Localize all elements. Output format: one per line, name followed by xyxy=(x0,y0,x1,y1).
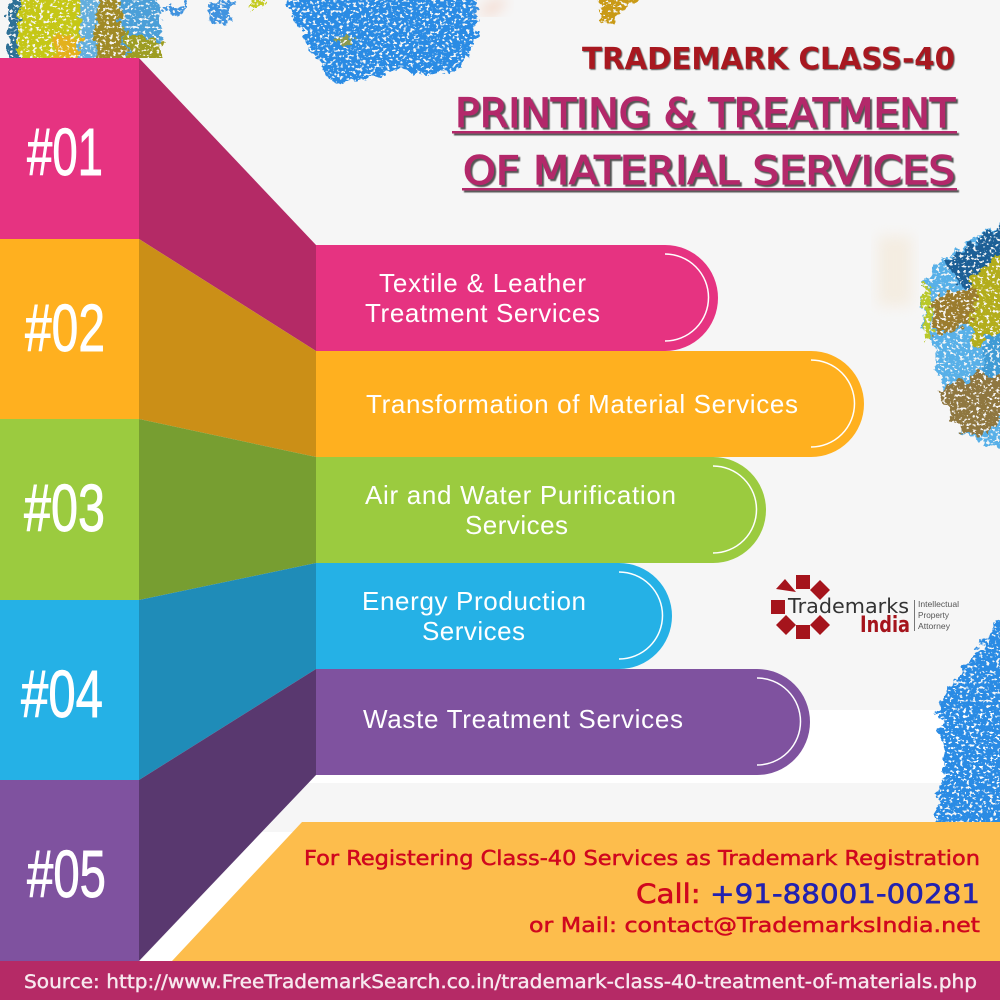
bar: air and water: Services xyxy=(465,510,568,540)
step block #03 xyxy=(0,419,139,600)
panel: contact call to action: Call: +91-88001-00281 xyxy=(636,879,980,910)
step block #02 xyxy=(0,239,139,419)
step block #04: #04 xyxy=(21,657,103,732)
bar: transformation: Transformation of Material Services xyxy=(366,389,798,419)
logo: Trademarks India: Attorney xyxy=(918,621,951,631)
logo: Trademarks India: India xyxy=(860,613,910,638)
bar: textile and leather xyxy=(316,245,718,351)
heading: of material services: OF MATERIAL SERVICES xyxy=(463,149,955,194)
logo: Trademarks India: Trademarks xyxy=(787,594,909,618)
logo: Trademarks India: Property xyxy=(918,610,950,620)
panel: contact call to action: or Mail: contact@TrademarksIndia.net xyxy=(529,913,980,937)
panel: 3D side faces xyxy=(139,58,316,961)
paint splash: bottom right blue xyxy=(934,620,1000,822)
panel: contact call to action: For Registering Class-40 Services as Trademark Registration xyxy=(304,846,980,870)
bar: waste treatment xyxy=(316,669,810,775)
bar: energy production xyxy=(316,563,672,669)
step block #02: #02 xyxy=(25,291,105,366)
icon: logo squares xyxy=(771,575,830,639)
panel: contact call to action xyxy=(172,822,1000,961)
step block #04 xyxy=(0,600,139,780)
step block #03: #03 xyxy=(24,471,105,546)
logo: Trademarks India: Intellectual xyxy=(918,599,959,609)
step block #01: #01 xyxy=(27,115,103,190)
step block #05 xyxy=(0,780,139,961)
bar: air and water xyxy=(316,457,766,563)
paint splash: top left xyxy=(4,0,166,58)
bar: waste treatment: Waste Treatment Services xyxy=(363,704,683,734)
paint splash: top yellow xyxy=(594,0,645,25)
paint splash: top centre blue xyxy=(282,0,478,84)
bar: textile and leather: Textile & Leather xyxy=(379,268,586,298)
paint splash: right multicolour xyxy=(878,215,1000,450)
paint splash: top peach fleck xyxy=(478,0,508,14)
bar: air and water: Air and Water Purification xyxy=(365,480,676,510)
logo: Trademarks India xyxy=(771,575,959,639)
step block #01 xyxy=(0,58,139,239)
bar: textile and leather: Treatment Services xyxy=(365,298,600,328)
bar: energy production: Energy Production xyxy=(362,586,586,616)
heading: trademark class: TRADEMARK CLASS-40 xyxy=(582,42,955,77)
bar: transformation xyxy=(316,351,864,457)
heading: printing and treatment: PRINTING & TREATMENT xyxy=(455,91,956,137)
footer: source bar xyxy=(0,961,1000,1000)
footer: source bar: Source: http://www.FreeTrademarkSearch.co.in/trademark-class-40-treatment-of-materials.php xyxy=(24,972,977,993)
step block #05: #05 xyxy=(27,837,106,912)
paint splash: top flecks xyxy=(160,0,266,24)
bar: energy production: Services xyxy=(422,616,525,646)
